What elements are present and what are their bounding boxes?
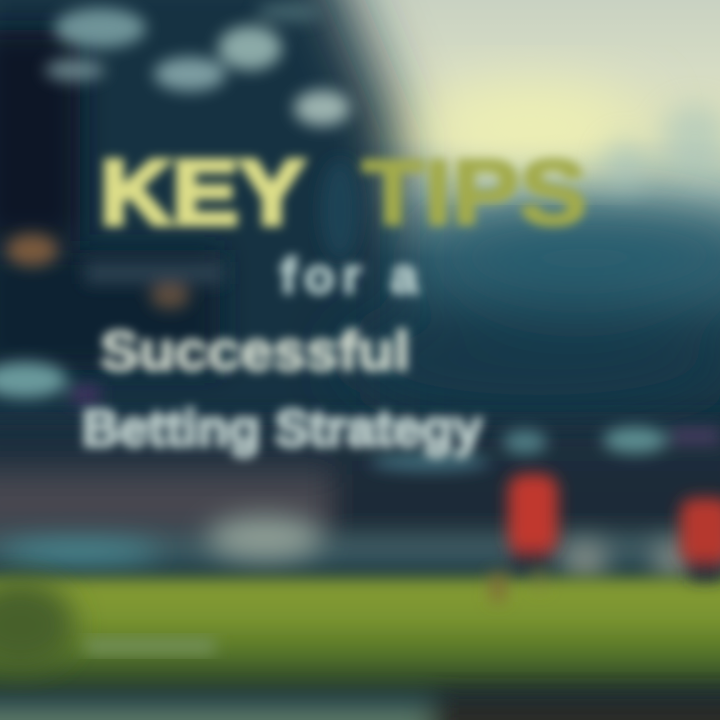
subtitle: for a: for a xyxy=(280,248,419,304)
title: KEY TIPS xyxy=(100,142,587,244)
player in red, centre xyxy=(490,474,558,602)
football pitch xyxy=(0,578,720,693)
pitch left shadow xyxy=(0,580,75,670)
teal haze on right xyxy=(340,205,720,415)
subtitle: Betting Strategy: Betting Strategy xyxy=(82,400,482,458)
crowd highlights xyxy=(0,516,690,578)
dark stadium structure on the left xyxy=(0,0,400,450)
left dark column xyxy=(0,30,220,370)
bottom foreground strip xyxy=(0,696,720,720)
title: KEY TIPS: KEY xyxy=(100,142,305,244)
pitch faint marking xyxy=(85,638,215,654)
stand details on left xyxy=(0,234,225,405)
subtitle: Successful: Successful xyxy=(100,319,410,382)
tower shadow between title words xyxy=(320,160,360,260)
stadium stands band xyxy=(0,425,720,562)
sky glow xyxy=(420,85,640,165)
title: KEY TIPS: TIPS xyxy=(362,142,587,244)
distant treeline right xyxy=(605,105,720,191)
player in red, right xyxy=(680,498,720,580)
roof truss highlights xyxy=(45,2,350,126)
upper stand highlights xyxy=(370,427,720,471)
